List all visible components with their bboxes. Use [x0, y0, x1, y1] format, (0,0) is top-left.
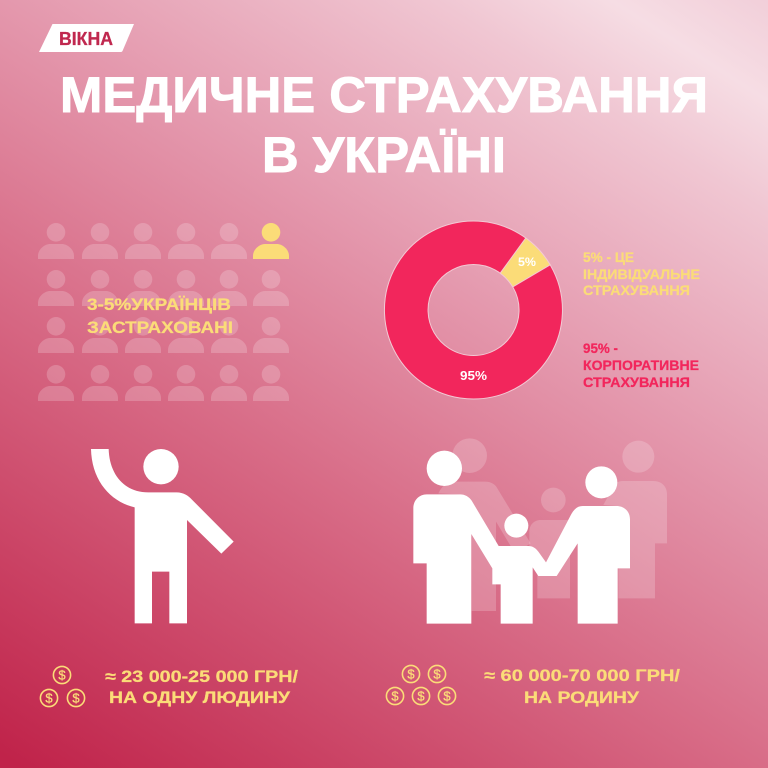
- legend: individual insurance: [583, 249, 700, 298]
- donut segment: 5%: [500, 238, 550, 287]
- title: МЕДИЧНЕ СТРАХУВАННЯ: [60, 67, 708, 123]
- price: family: ≈ 60 000-70 000 ГРН/: [484, 667, 680, 685]
- logo: Вікна: ВІКНА: [59, 29, 113, 49]
- price: one person: [105, 668, 298, 707]
- price: family: [484, 667, 680, 707]
- icon: coins, family: $: [417, 688, 425, 704]
- legend: individual insurance: ІНДИВІДУАЛЬНЕ: [583, 266, 700, 282]
- price: one person: ≈ 23 000-25 000 ГРН/: [105, 668, 298, 686]
- icon: family: [413, 438, 667, 624]
- pictogram grid: insured share of Ukrainians: [38, 223, 289, 401]
- icon: coins, family: $: [407, 666, 415, 682]
- faded family silhouettes: [438, 438, 667, 611]
- legend: corporate insurance: [583, 340, 699, 390]
- icon: coins, family: $: [433, 666, 441, 682]
- icon: waving person: [91, 449, 234, 623]
- logo: Вікна: [39, 24, 134, 52]
- price: one person: НА ОДНУ ЛЮДИНУ: [109, 689, 291, 707]
- insured share text: ЗАСТРАХОВАНІ: [87, 318, 233, 337]
- donut value: 95%: 95%: [460, 368, 487, 383]
- title: [60, 67, 708, 183]
- insured share text: 3-5%УКРАЇНЦІВ: [87, 295, 231, 314]
- legend: individual insurance: СТРАХУВАННЯ: [583, 282, 690, 298]
- price: family: НА РОДИНУ: [524, 689, 640, 707]
- legend: corporate insurance: 95% -: [583, 340, 618, 356]
- icon: coins, one person: $: [58, 668, 66, 682]
- title: В УКРАЇНІ: [262, 127, 506, 183]
- icon: coins, one person: [40, 666, 85, 707]
- icon: coins, one person: $: [72, 690, 80, 706]
- icon: highlighted person: [253, 223, 289, 259]
- legend: corporate insurance: СТРАХУВАННЯ: [583, 374, 690, 390]
- legend: corporate insurance: КОРПОРАТИВНЕ: [583, 357, 699, 373]
- legend: individual insurance: 5% - ЦЕ: [583, 249, 634, 265]
- icon: coins, family: $: [391, 688, 399, 704]
- insured share text: [87, 295, 233, 337]
- foreground family: [413, 451, 630, 624]
- donut value: 5%: 5%: [518, 255, 536, 269]
- icon: coins, family: [386, 665, 456, 705]
- icon: coins, family: $: [443, 688, 451, 704]
- icon: coins, one person: $: [45, 690, 53, 706]
- donut chart: [384, 221, 562, 399]
